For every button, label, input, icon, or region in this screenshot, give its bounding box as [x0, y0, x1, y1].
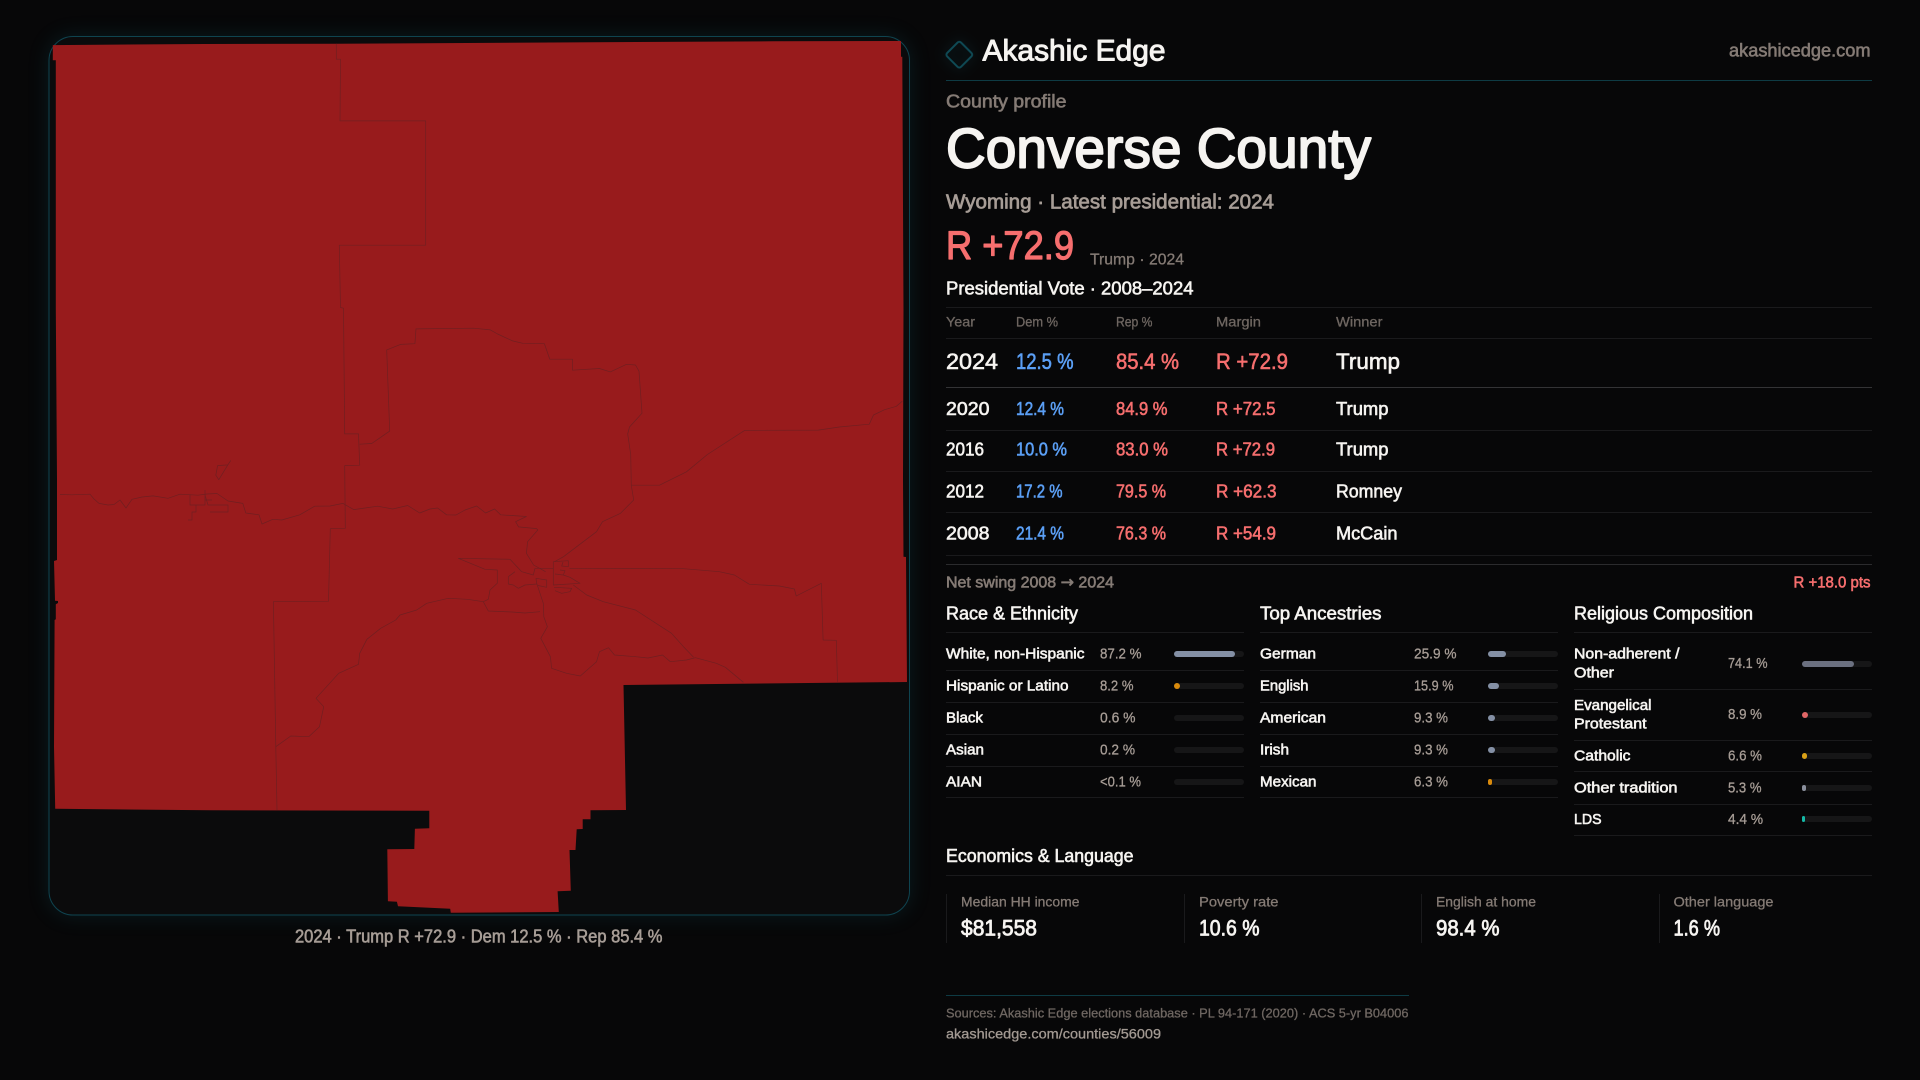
row: Catholic: [1574, 748, 1872, 765]
heading: Race & Ethnicity: [946, 603, 1078, 623]
panel: top ancestries: [1260, 603, 1558, 798]
row: Black: 0.6 %: [1100, 710, 1136, 727]
table header row: Dem %: [1016, 314, 1058, 330]
row 2020: 84.9 %: [1116, 399, 1168, 419]
table header row: Year: [946, 314, 975, 330]
row 2016: 83.0 %: [1116, 440, 1168, 460]
row: Evangelical Protestant: 8.9 %: [1728, 706, 1762, 723]
row: Other tradition: [1574, 780, 1872, 797]
row: Catholic: 6.6 %: [1728, 748, 1762, 765]
row: AIAN: AIAN: [946, 774, 982, 791]
stat: poverty rate: 10.6 %: [1199, 916, 1260, 941]
row: English: English: [1260, 678, 1308, 695]
stat: English at home: English at home: [1436, 894, 1536, 910]
site link: akashicedge.com: [1729, 41, 1870, 61]
row: White, non-Hispanic: 87.2 %: [1100, 646, 1142, 663]
row: Asian: Asian: [946, 742, 984, 759]
row: Irish: 9.3 %: [1414, 742, 1448, 759]
row: English: 15.9 %: [1414, 678, 1454, 695]
row 2012: R +62.3: [1216, 481, 1276, 501]
table header row: Rep %: [1116, 314, 1152, 330]
row: Non-adherent / Other: Non-adherent /: [1574, 646, 1680, 663]
row: Black: Black: [946, 710, 983, 727]
row 2012: 17.2 %: [1016, 481, 1062, 501]
row 2008: McCain: [1336, 523, 1398, 543]
header: brand: [945, 35, 1166, 69]
row 2024: R +72.9: [1216, 349, 1288, 374]
row: Hispanic or Latino: 8.2 %: [1100, 678, 1134, 695]
footer: sources: akashicedge.com/counties/56009: [946, 1025, 1161, 1041]
row 2008: R +54.9: [1216, 523, 1276, 543]
row: Non-adherent / Other: [1574, 646, 1872, 682]
row: Catholic: Catholic: [1574, 748, 1631, 765]
row: AIAN: [946, 774, 1244, 791]
row 2020: [946, 399, 1388, 419]
row 2012: [946, 481, 1402, 501]
row: Evangelical Protestant: Evangelical: [1574, 697, 1652, 714]
stat: poverty rate: [1184, 894, 1279, 943]
row: American: [1260, 710, 1558, 727]
eyebrow: county profile: County profile: [946, 92, 1066, 112]
table header row: Margin: [1216, 314, 1261, 330]
stat: other language: 1.6 %: [1674, 916, 1720, 941]
row 2020: R +72.5: [1216, 399, 1276, 419]
stat: other language: [1660, 894, 1774, 943]
row 2016: R +72.9: [1216, 440, 1275, 460]
row: White, non-Hispanic: [946, 646, 1244, 663]
panel: race and ethnicity: [946, 603, 1244, 798]
stat: other language: Other language: [1674, 894, 1774, 910]
row 2020: 12.4 %: [1016, 399, 1064, 419]
row 2024: [946, 349, 1400, 374]
stat: median household income: $81,558: [961, 916, 1037, 941]
row 2008: [946, 523, 1398, 543]
row: American: American: [1260, 710, 1326, 727]
footer: sources: Sources: Akashic Edge elections database · PL 94-171 (2020) · ACS 5-yr B04006: [946, 1006, 1408, 1021]
row 2008: 76.3 %: [1116, 523, 1166, 543]
row: AIAN: <0.1 %: [1100, 774, 1141, 791]
footer: sources: [946, 1006, 1408, 1041]
row 2016: 2016: [946, 440, 984, 460]
row: Irish: [1260, 742, 1558, 759]
row: German: German: [1260, 646, 1316, 663]
row: Mexican: [1260, 774, 1558, 791]
row 2024: 2024: [946, 349, 998, 374]
stat: median household income: Median HH income: [961, 894, 1080, 910]
headline margin: Trump · 2024: [1090, 251, 1184, 268]
map: Converse County precinct shape: [53, 41, 907, 913]
row 2012: Romney: [1336, 481, 1402, 501]
row: Other tradition: Other tradition: [1574, 780, 1678, 797]
icon: diamond logo: [945, 41, 973, 69]
row 2024: 12.5 %: [1016, 349, 1074, 374]
row: Other tradition: 5.3 %: [1728, 780, 1762, 797]
subtitle: Wyoming · Latest presidential: 2024: [946, 191, 1274, 213]
stat: English at home: 98.4 %: [1436, 916, 1500, 941]
stat: English at home: [1422, 894, 1536, 943]
row: Asian: [946, 742, 1244, 759]
row 2012: 79.5 %: [1116, 481, 1166, 501]
row: LDS: 4.4 %: [1728, 811, 1763, 828]
row: Mexican: 6.3 %: [1414, 774, 1448, 791]
row 2020: Trump: [1336, 399, 1388, 419]
row: Non-adherent / Other: 74.1 %: [1728, 655, 1768, 672]
row: Hispanic or Latino: Hispanic or Latino: [946, 678, 1068, 695]
panel: religious composition: [1574, 603, 1872, 836]
net swing row: Net swing 2008 → 2024: [946, 572, 1114, 591]
row 2024: 85.4 %: [1116, 349, 1179, 374]
stat: median household income: [946, 894, 1080, 943]
row: Evangelical Protestant: Protestant: [1574, 716, 1647, 733]
caption: map summary: 2024 · Trump R +72.9 · Dem 12.5 % · Rep 85.4 %: [295, 927, 662, 947]
row: Non-adherent / Other: Other: [1574, 665, 1614, 682]
row: Irish: Irish: [1260, 742, 1289, 759]
headline margin: [946, 224, 1184, 268]
headline margin: R +72.9: [946, 224, 1074, 268]
row: American: 9.3 %: [1414, 710, 1448, 727]
row 2016: Trump: [1336, 440, 1388, 460]
title: county name: Converse County: [946, 117, 1371, 180]
row: German: 25.9 %: [1414, 646, 1456, 663]
heading: Religious Composition: [1574, 603, 1753, 623]
row 2016: 10.0 %: [1016, 440, 1067, 460]
row: LDS: LDS: [1574, 811, 1602, 828]
net swing row: R +18.0 pts: [1794, 574, 1870, 591]
row 2016: [946, 440, 1388, 460]
brand name: Akashic Edge: [982, 35, 1166, 68]
row: Mexican: Mexican: [1260, 774, 1316, 791]
row: German: [1260, 646, 1558, 663]
row: LDS: [1574, 811, 1872, 828]
row 2024: Trump: [1336, 349, 1400, 374]
heading: Top Ancestries: [1260, 603, 1382, 623]
panel: economics and language: [946, 846, 1872, 943]
row 2020: 2020: [946, 399, 990, 419]
row: Evangelical Protestant: [1574, 697, 1872, 733]
row 2008: 21.4 %: [1016, 523, 1064, 543]
row: Hispanic or Latino: [946, 678, 1244, 695]
panel: county map: [49, 36, 910, 915]
row: Black: [946, 710, 1244, 727]
net swing row: [946, 572, 1870, 591]
panel: presidential vote table: [946, 278, 1872, 556]
stat: poverty rate: Poverty rate: [1199, 894, 1279, 910]
table header row: Winner: [1336, 314, 1383, 330]
row: English: [1260, 678, 1558, 695]
table header row: [946, 314, 1383, 330]
row: White, non-Hispanic: White, non-Hispanic: [946, 646, 1085, 663]
heading: Economics & Language: [946, 846, 1134, 866]
row: Asian: 0.2 %: [1100, 742, 1135, 759]
row 2012: 2012: [946, 481, 984, 501]
row 2008: 2008: [946, 523, 990, 543]
table heading: Presidential Vote · 2008–2024: [946, 278, 1194, 298]
